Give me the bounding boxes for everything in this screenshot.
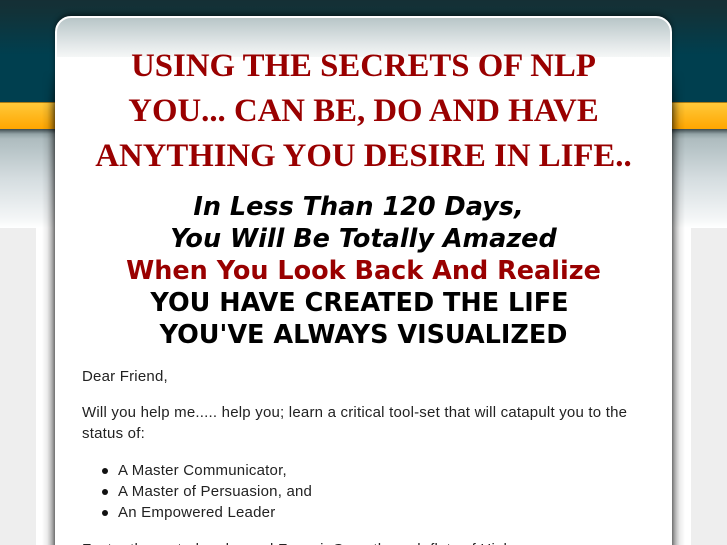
subheading — [126, 192, 601, 350]
title line 2: YOU... CAN BE, DO AND HAVE — [128, 93, 599, 129]
bullet list — [102, 462, 312, 521]
subheading line 5: YOU'VE ALWAYS VISUALIZED — [160, 320, 567, 350]
subheading line 4: YOU HAVE CREATED THE LIFE — [150, 288, 569, 318]
intro line 2: status of: — [82, 425, 145, 442]
bullet 3 — [102, 510, 108, 516]
background: grey gradient band — [0, 129, 727, 228]
title line 1: USING THE SECRETS OF NLP — [131, 48, 596, 84]
intro line 1: Will you help me..... help you; learn a critical tool-set that will catapult you to the — [82, 404, 627, 421]
subheading line 1: In Less Than 120 Days, — [193, 192, 524, 222]
side box: left — [0, 228, 36, 545]
item 2: A Master of Persuasion, and — [118, 483, 312, 500]
side box: right — [691, 228, 727, 545]
item 3: An Empowered Leader — [118, 504, 275, 521]
title line 3: ANYTHING YOU DESIRE IN LIFE.. — [95, 138, 632, 174]
panel shadow: left — [44, 82, 55, 545]
panel shadow: right — [672, 82, 683, 545]
bullet 2 — [102, 489, 108, 495]
greeting: Dear Friend, — [82, 368, 168, 385]
background: dark teal header — [0, 0, 727, 102]
title — [95, 48, 632, 174]
panel header gradient — [57, 18, 670, 57]
subheading line 3: When You Look Back And Realize — [126, 256, 601, 286]
item 1: A Master Communicator, — [118, 462, 287, 479]
background: orange band — [0, 102, 727, 129]
bullet 1 — [102, 468, 108, 474]
intro paragraph — [82, 404, 627, 442]
subheading line 2: You Will Be Totally Amazed — [170, 224, 557, 254]
